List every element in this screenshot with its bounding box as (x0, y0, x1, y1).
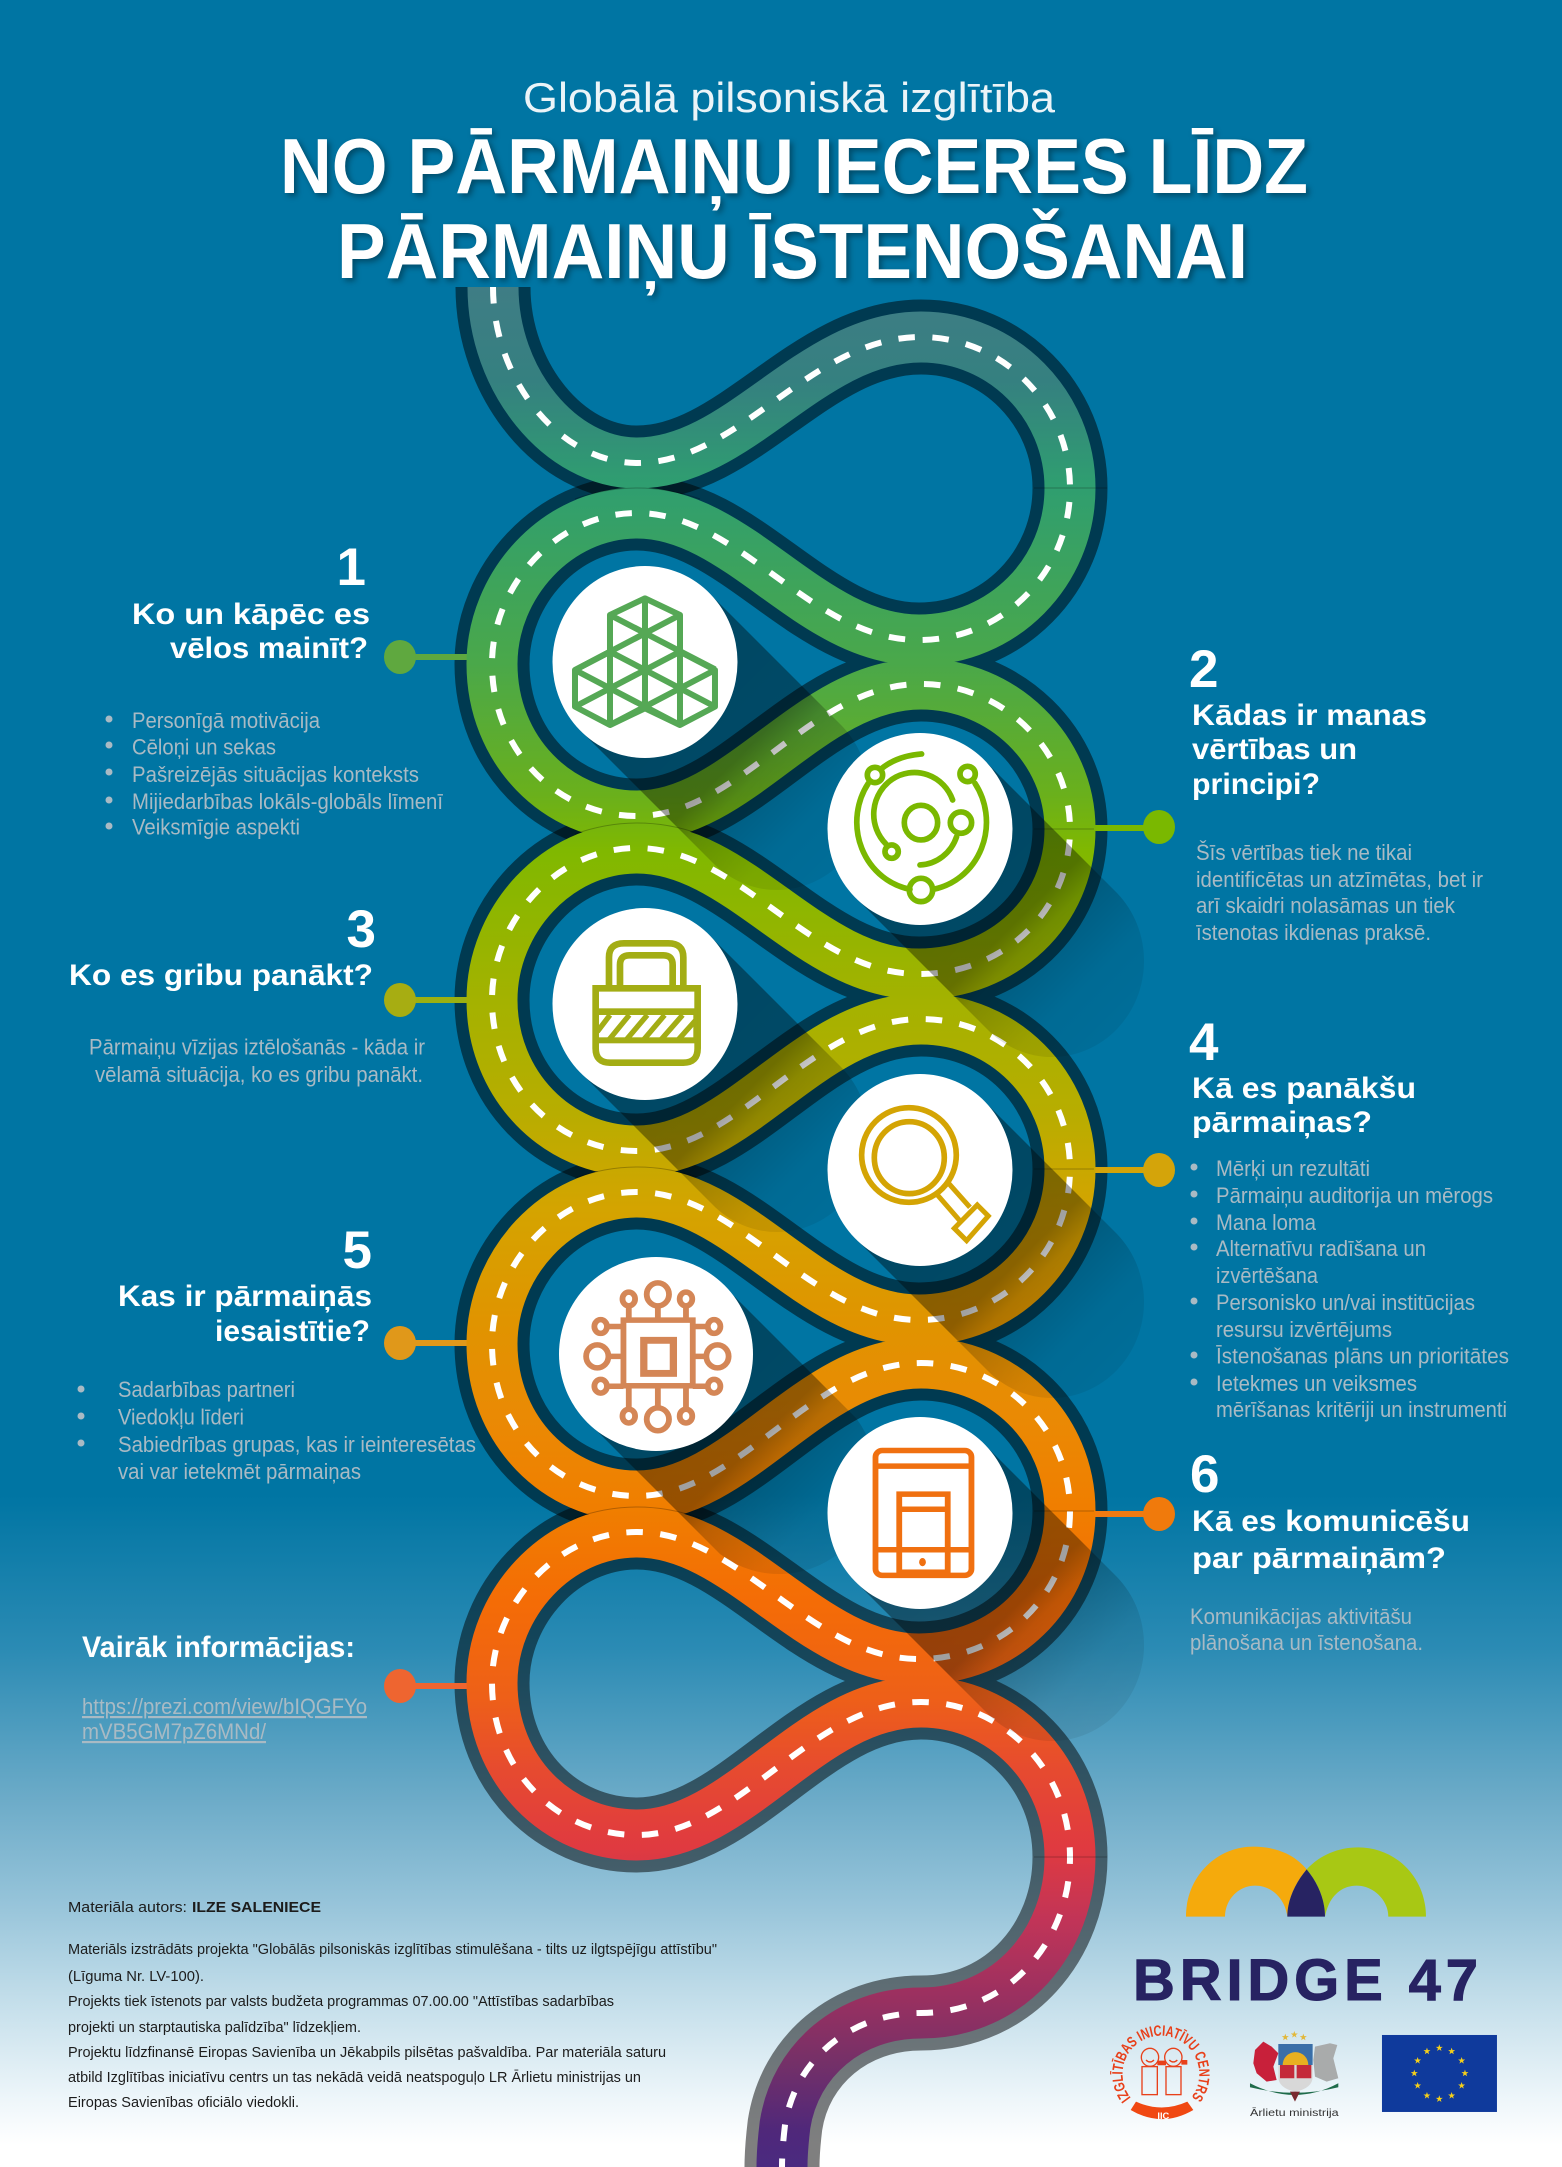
heading 4: Kā es panākšu (1192, 1072, 1416, 1105)
text 3 (89, 1034, 425, 1087)
list 4: Alternatīvu radīšana un (1216, 1236, 1426, 1261)
list 1: Mijiedarbības lokāls-globāls līmenī (132, 789, 444, 814)
logo: Ārlietu ministrija (1250, 2031, 1339, 2119)
panel: step 3 (69, 900, 425, 1087)
list 5: Viedokļu līderi (118, 1404, 244, 1430)
project description: (Līguma Nr. LV-100). (68, 1968, 204, 1985)
heading 3: Ko es gribu panākt? (69, 959, 373, 992)
wordmark: BRIDGE 47 (1133, 1948, 1478, 2013)
icon circle 1: cubes (552, 566, 738, 758)
heading 6: Kā es komunicēšu (1192, 1505, 1470, 1538)
project description (68, 1941, 717, 2111)
heading 6: par pārmaiņām? (1192, 1542, 1446, 1575)
heading 2 (1192, 699, 1427, 801)
list 4 (1190, 1156, 1509, 1422)
main heading: PĀRMAIŅU ĪSTENOŠANAI (337, 207, 1248, 296)
icon circle 4: magnifier (828, 1074, 1012, 1266)
author line: Materiāla autors: (68, 1899, 187, 1916)
logo: Izglītības iniciatīvu centrs: IZGLĪTĪBAS INICIATĪVU CENTRS (1110, 2025, 1210, 2104)
heading 2: Kādas ir manas (1192, 699, 1427, 732)
road surface (492, 287, 1070, 2167)
logo: Izglītības iniciatīvu centrs: IIC (1157, 2111, 1170, 2121)
text 2 (1196, 840, 1483, 945)
heading more information: Vairāk informācijas: (82, 1631, 355, 1664)
number 2: 2 (1189, 640, 1218, 699)
project description: Projekts tiek īstenots par valsts budžeta programmas 07.00.00 "Attīstības sadarbības (68, 1993, 614, 2010)
project description: projekti un starptautiska palīdzība" līdzekļiem. (68, 2019, 361, 2036)
list 1 (106, 708, 444, 840)
heading 4: pārmaiņas? (1192, 1106, 1372, 1139)
panel: more information (82, 1631, 367, 1744)
winding road (400, 287, 1160, 2167)
number 5: 5 (343, 1221, 372, 1280)
text 3: Pārmaiņu vīzijas iztēlošanās - kāda ir (89, 1034, 425, 1060)
text 6: Komunikācijas aktivitāšu (1190, 1604, 1412, 1629)
heading 1: Ko un kāpēc es (132, 598, 370, 631)
list 4: Personisko un/vai institūcijas (1216, 1290, 1475, 1315)
list 5: Sadarbības partneri (118, 1377, 295, 1402)
heading 5: iesaistītie? (215, 1315, 370, 1348)
project description: Projektu līdzfinansē Eiropas Savienība un Jēkabpils pilsētas pašvaldība. Par materiāla saturu (68, 2044, 666, 2061)
list 5 (78, 1377, 476, 1484)
panel: step 6 (1190, 1445, 1470, 1655)
list 4: Pārmaiņu auditorija un mērogs (1216, 1183, 1493, 1208)
heading 4 (1192, 1072, 1416, 1139)
subtitle: Globālā pilsoniskā izglītība (523, 74, 1056, 121)
heading 2: principi? (1192, 768, 1320, 801)
panel: step 2 (1189, 640, 1483, 945)
road casing (492, 287, 1070, 2167)
icon circle 5: microchip (559, 1257, 753, 1451)
list 4: Mērķi un rezultāti (1216, 1156, 1370, 1181)
heading 1 (132, 598, 370, 665)
logo: Bridge 47 (1133, 1847, 1478, 2013)
road centre dashes (492, 287, 1070, 2167)
list 4: resursu izvērtējums (1216, 1317, 1392, 1342)
list 5: vai var ietekmēt pārmaiņas (118, 1459, 361, 1484)
text 2: arī skaidri nolasāmas un tiek (1196, 893, 1456, 918)
heading 1: vēlos mainīt? (170, 632, 368, 665)
heading 5 (118, 1280, 372, 1348)
list 1: Pašreizējās situācijas konteksts (132, 762, 419, 787)
icon circle 3: padlock (552, 908, 738, 1100)
long shadows of the circles (580, 594, 1144, 1741)
title block (280, 74, 1308, 296)
logo: EU flag (1382, 2035, 1497, 2112)
number 1: 1 (337, 538, 366, 597)
panel: step 5 (78, 1221, 476, 1484)
list 4: izvērtēšana (1216, 1263, 1319, 1288)
panel: step 1 (106, 538, 444, 840)
link: mVB5GM7pZ6MNd/ (82, 1719, 267, 1744)
number 3: 3 (347, 900, 376, 959)
author line: ILZE SALENIECE (192, 1899, 321, 1916)
panel: step 4 (1189, 1013, 1509, 1422)
icon circle 6: tablet and phone (828, 1417, 1012, 1609)
connector lines (400, 657, 1160, 1686)
project description: atbild Izglītības iniciatīvu centrs un tas nekādā veidā neatspoguļo LR Ārlietu ministrijas un (68, 2069, 641, 2086)
list 4: Ietekmes un veiksmes (1216, 1371, 1417, 1396)
list 4: mērīšanas kritēriji un instrumenti (1216, 1397, 1507, 1422)
text 2: identificētas un atzīmētas, bet ir (1196, 867, 1483, 892)
text 6: plānošana un īstenošana. (1190, 1630, 1423, 1655)
connector dots (384, 640, 1175, 1703)
link (82, 1694, 367, 1744)
footer credits (68, 1899, 717, 2111)
list 1: Personīgā motivācija (132, 708, 321, 733)
main heading (280, 122, 1308, 296)
text 2: īstenotas ikdienas praksē. (1196, 920, 1431, 945)
icon circle 2: orbits (828, 733, 1012, 925)
heading 2: vērtības un (1192, 733, 1357, 766)
heading 5: Kas ir pārmaiņās (118, 1280, 372, 1313)
project description: Eiropas Savienības oficiālo viedokli. (68, 2094, 299, 2111)
number 6: 6 (1190, 1445, 1219, 1504)
list 5: Sabiedrības grupas, kas ir ieinteresētas (118, 1432, 476, 1457)
list 1: Cēloņi un sekas (132, 734, 276, 760)
author line (68, 1899, 321, 1916)
list 4: Mana loma (1216, 1210, 1317, 1235)
text 6 (1190, 1604, 1423, 1655)
text 3: vēlamā situācija, ko es gribu panākt. (95, 1062, 423, 1087)
number 4: 4 (1189, 1013, 1219, 1072)
ministry label: Ārlietu ministrija (1250, 2107, 1339, 2119)
list 1: Veiksmīgie aspekti (132, 814, 300, 840)
heading 6 (1192, 1505, 1470, 1575)
link: https://prezi.com/view/bIQGFYo (82, 1694, 367, 1719)
list 4: Īstenošanas plāns un prioritātes (1216, 1344, 1509, 1368)
bridge arcs (1186, 1847, 1426, 1917)
coat of arms (1250, 2031, 1338, 2102)
main heading: NO PĀRMAIŅU IECERES LĪDZ (280, 122, 1308, 211)
project description: Materiāls izstrādāts projekta "Globālās pilsoniskās izglītības stimulēšana - tilts uz ilgtspējīgu attīstību" (68, 1941, 717, 1958)
text 2: Šīs vērtības tiek ne tikai (1196, 840, 1412, 865)
